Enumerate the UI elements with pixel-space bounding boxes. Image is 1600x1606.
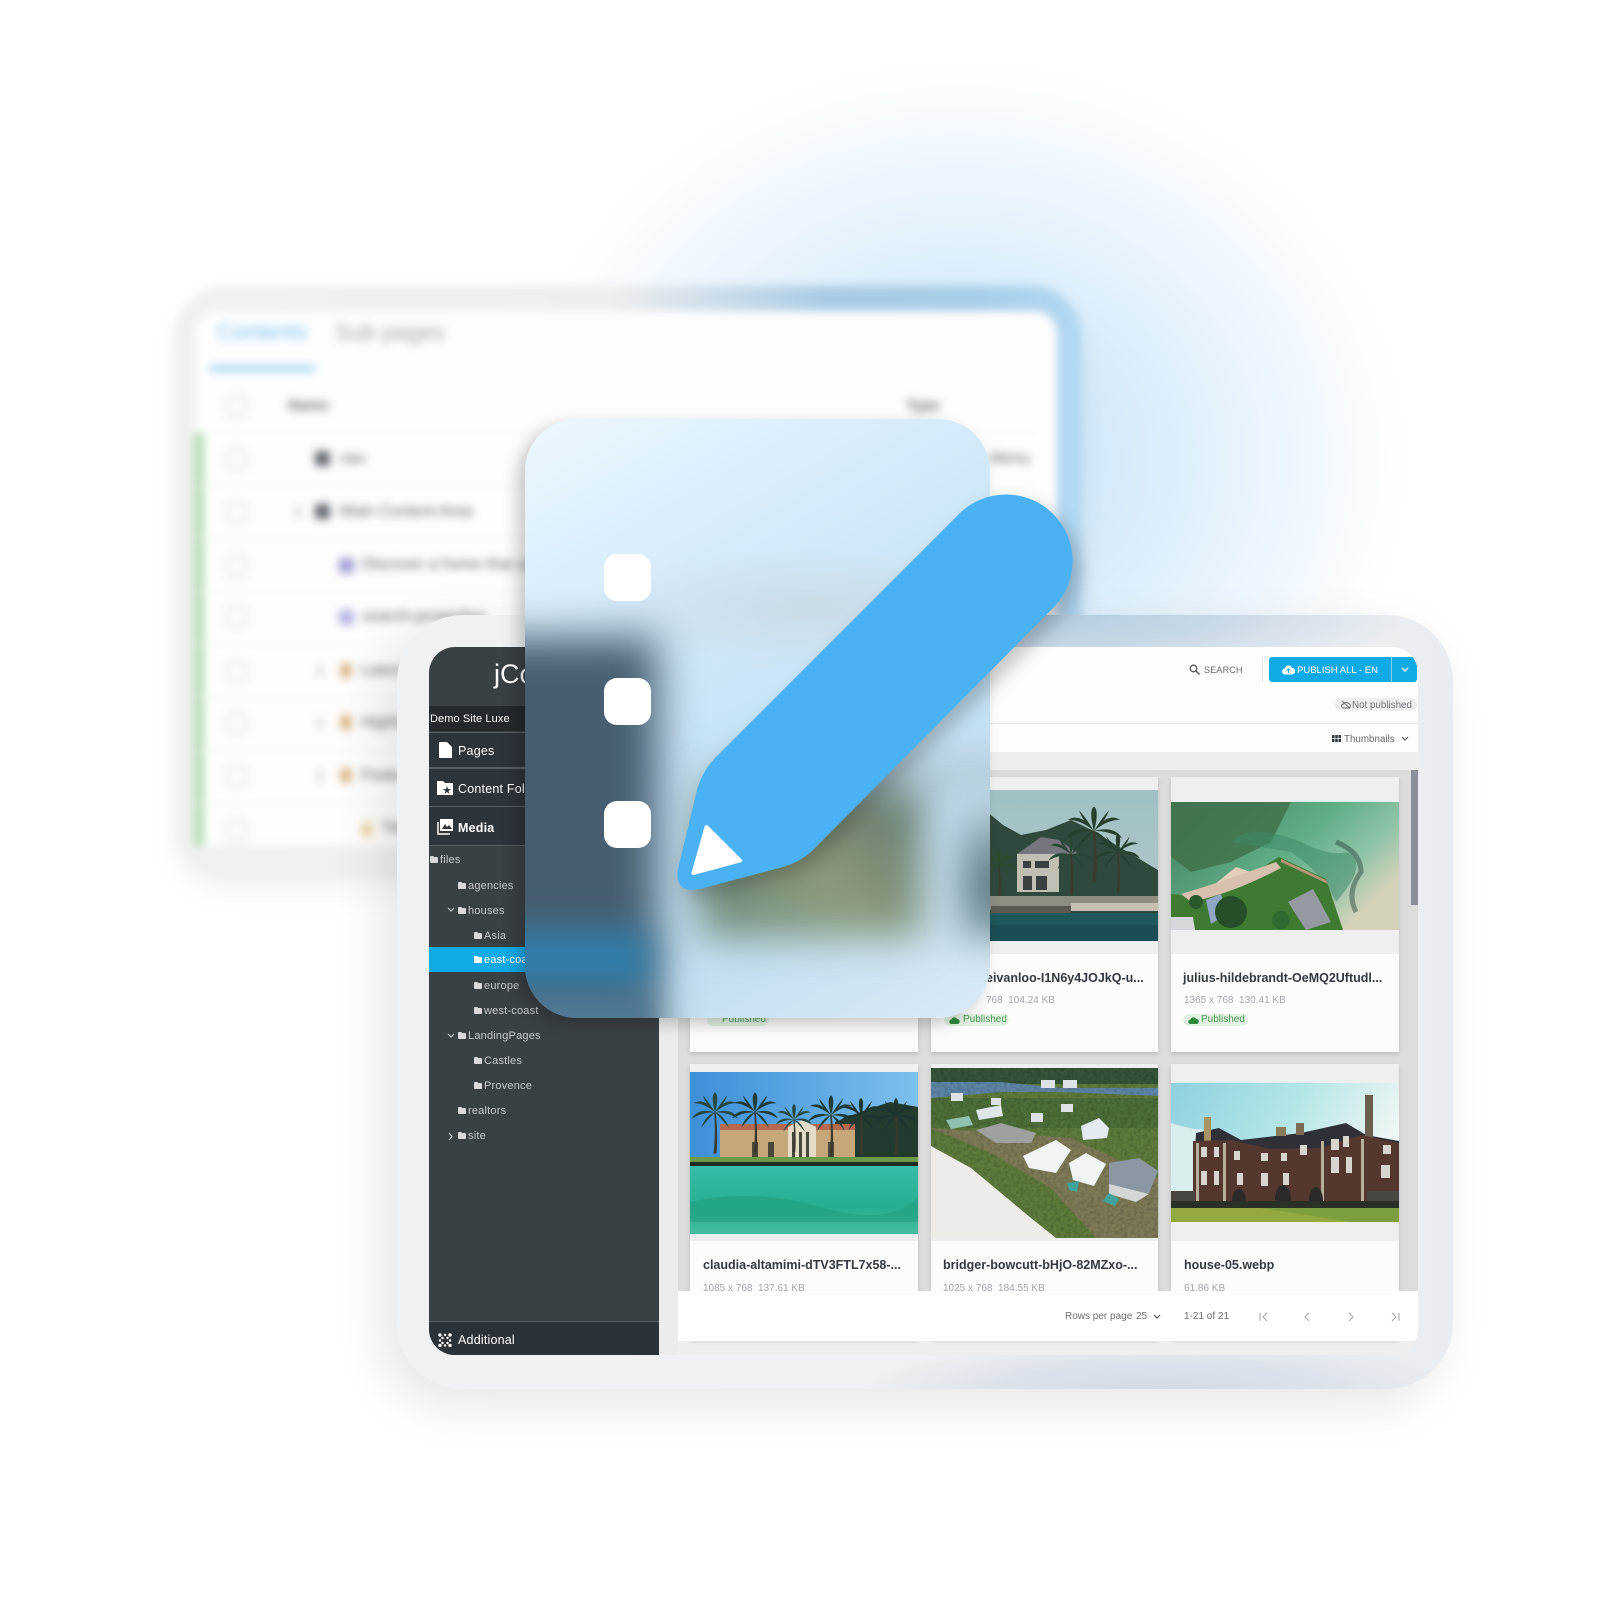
folder tree: europe [484,980,519,992]
card: row 1, column 3 [1171,777,1399,1052]
card: row 2, column 2: 1025 x 768 184.55 KB [943,1283,1045,1294]
menu item: Pages [429,732,659,769]
back device screen [195,311,1057,846]
note dot 1 [604,554,651,601]
frosted backdrop [525,419,990,1018]
pagination bar [678,1291,1418,1341]
photo: waterfront villa [990,790,1158,941]
card: row 1, column 1: Published [722,1014,766,1025]
folder tree: agencies [468,880,514,892]
card: row 1, column 2 [931,777,1158,1052]
table rows: search-properties [362,608,486,625]
card: row 2, column 3: house-05.webp [1184,1258,1274,1272]
menu item: Content Folders [429,769,659,807]
not published badge: Not published [1352,700,1412,711]
table rows: Featured [361,767,425,784]
folder tree: houses [468,905,505,917]
active tab underline [210,366,315,371]
note dot 2 [604,678,651,725]
page navigation [1259,1312,1400,1322]
photo: aerial coastline [1171,802,1399,930]
card: row 1, column 2: Published [963,1014,1007,1025]
card: row 1, column 3: 1365 x 768 130.41 KB [1184,995,1286,1006]
back device: contents table (blurred) [174,286,1082,880]
table rows [293,444,1034,842]
card: row 1, column 1 [690,777,918,1052]
folder tree: LandingPages [468,1030,541,1042]
folder tree: Provence [484,1080,532,1092]
table rows: nav [340,450,366,467]
media grid [678,752,1418,1355]
folder tree: files [440,854,461,866]
photo: brick manor house [1171,1083,1399,1222]
divider [678,723,1418,724]
menu item: Additional: Additional [458,1333,515,1347]
publish button [1269,657,1417,682]
green status bar [195,433,203,846]
menu item: Media [429,807,659,846]
logo: jCo [494,659,535,689]
folder tree: Asia [484,930,506,942]
front device frame [397,615,1453,1389]
glass note panel [525,419,990,1018]
thumbnails selector: Thumbnails [1344,734,1395,745]
rows per page: Rows per page [1065,1311,1132,1322]
table rows: Highlight [361,714,423,731]
menu item: Pages: Pages [458,744,494,758]
table header: Name [288,397,329,414]
folder tree: west-coast [484,1005,539,1017]
card: row 2, column 1: claudia-altamimi-dTV3FTL7x58-... [703,1258,901,1272]
not published badge [1335,698,1417,711]
site selector [429,706,659,731]
publish button: PUBLISH ALL - EN [1297,665,1378,676]
pagination bar: 25 [1136,1311,1147,1322]
menu item: Media: Media [458,821,494,835]
card: row 2, column 2 [931,1064,1158,1339]
tab: Contents: Contents [217,319,307,344]
card: row 1, column 3: julius-hildebrandt-OeMQ2Uftudl... [1183,971,1382,985]
card: row 1, column 3: Published [1201,1014,1245,1025]
scrollbar [1411,770,1418,905]
toolbar [678,647,1418,752]
icon: pencil [677,494,1088,906]
menu item: Additional [429,1321,659,1355]
card: row 1, column 2: eivanloo-I1N6y4JOJkQ-u... [986,971,1144,985]
tab: Sub pages: Sub pages [335,319,445,345]
page range: 1-21 of 21 [1184,1311,1229,1322]
folder tree [429,854,541,1142]
menu item: Content Folders: Content Folders [458,782,550,796]
card: row 2, column 3: 61.86 KB [1184,1283,1225,1294]
folder tree: realtors [468,1105,506,1117]
card: row 2, column 3 [1171,1064,1399,1339]
folder tree: site [468,1130,486,1142]
selected folder [429,947,659,972]
note dot 3 [604,801,651,848]
card: row 2, column 1: 1085 x 768 137.61 KB [703,1283,805,1294]
thumbnails selector [1332,734,1408,745]
table rows: Discover a home that suits you [362,556,581,573]
back device screen: Type [906,397,940,414]
site selector: Demo Site Luxe [430,713,510,725]
folder tree: Castles [484,1055,522,1067]
card: row 2, column 1 [690,1064,918,1339]
selected folder: east-coast [484,954,537,966]
search: SEARCH [1204,665,1243,675]
application screen [429,647,1418,1355]
table rows: Title [381,820,411,837]
search [1190,664,1243,675]
table rows: Menu [990,450,1030,467]
sidebar [429,647,659,1355]
pencil tip [694,827,740,873]
table rows: Latest [361,662,405,679]
card: row 1, column 2: 768 104.24 KB [986,995,1055,1006]
photo: aerial beach houses [931,1068,1158,1238]
photo: mansion across turquoise water [690,1072,918,1234]
table rows: Main Content Area [340,503,473,520]
card: row 2, column 2: bridger-bowcutt-bHjO-82MZxo-... [943,1258,1137,1272]
